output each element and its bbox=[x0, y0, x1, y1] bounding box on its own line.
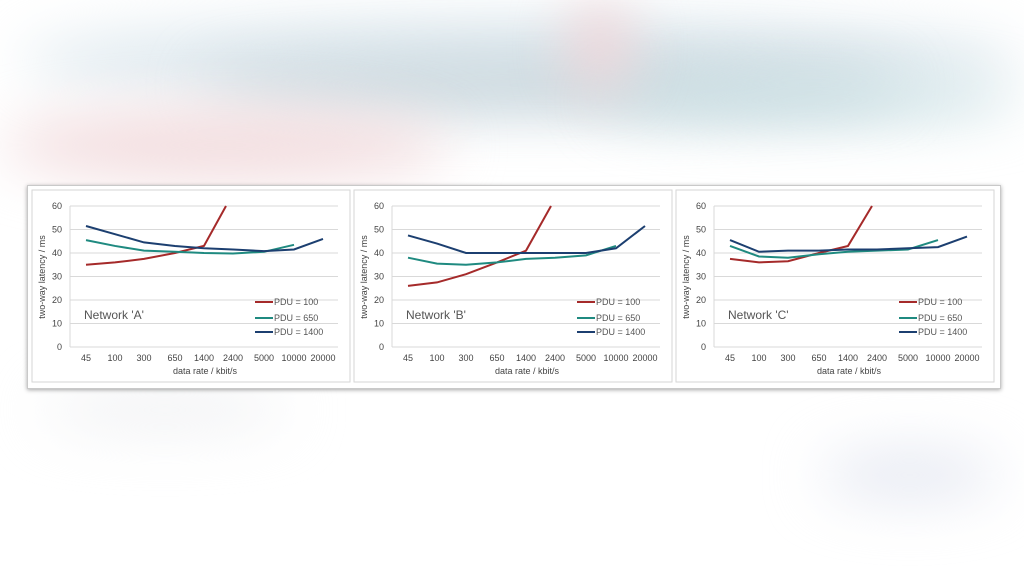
panel: Network B bbox=[354, 190, 672, 382]
label: Network C: Network 'C' bbox=[728, 308, 789, 322]
label: Network B: Network 'B' bbox=[406, 308, 466, 322]
panel: Network A bbox=[32, 190, 350, 382]
chart card bbox=[27, 185, 1001, 389]
panel: Network C bbox=[676, 190, 994, 382]
label: Network A: Network 'A' bbox=[84, 308, 144, 322]
